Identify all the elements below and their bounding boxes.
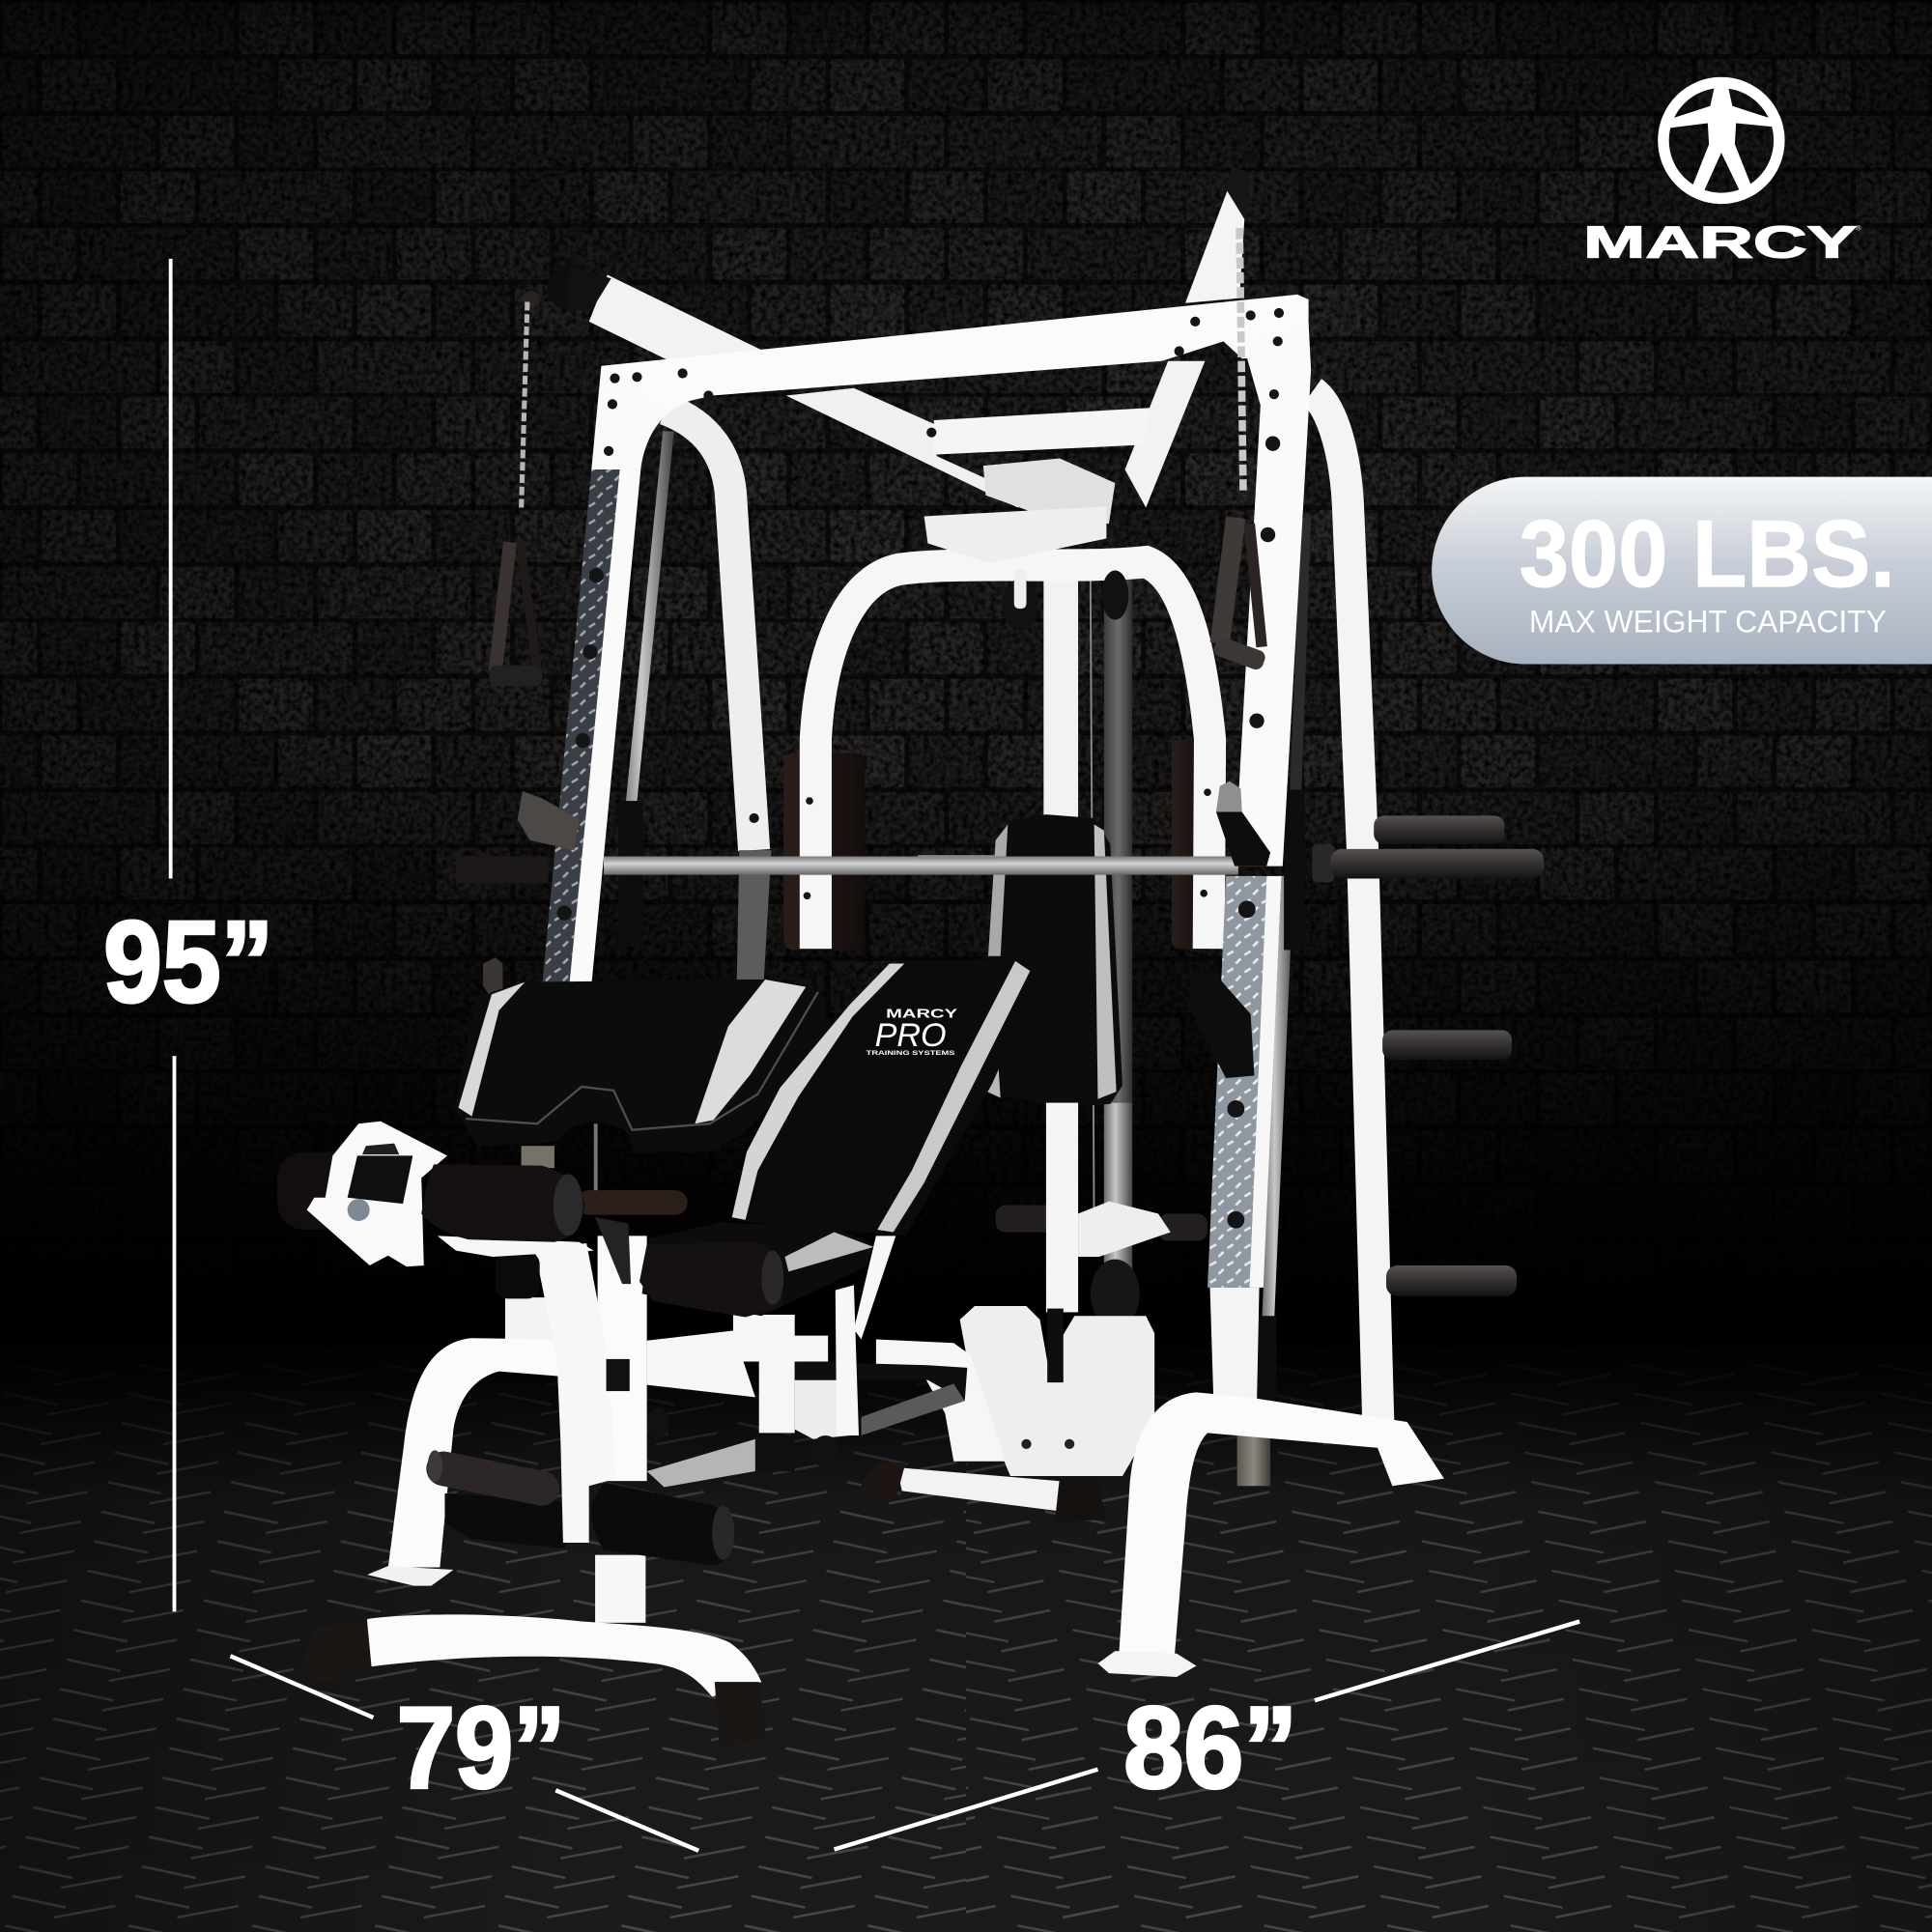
weight stack pulley <box>1091 1260 1140 1328</box>
rear pulley arm lower span <box>786 388 1023 508</box>
far leg roller <box>277 1152 363 1230</box>
callout: max weight capacity <box>1432 477 1932 665</box>
lower bar catch <box>1190 972 1254 1078</box>
dimension: height <box>103 259 273 1611</box>
depth line left <box>231 1656 373 1718</box>
barbell <box>604 855 1238 875</box>
backrest logo: PRO <box>875 1017 947 1054</box>
leg adjuster peg <box>589 1193 675 1212</box>
pec pad left <box>783 753 865 950</box>
rail knobs <box>647 1407 840 1467</box>
back pad <box>984 814 1122 1108</box>
cross bar <box>934 408 1150 455</box>
weight pegs <box>996 815 1517 1296</box>
right handle <box>1211 518 1267 671</box>
logo: Marcy <box>1583 82 1861 268</box>
left guide rod collar <box>618 801 643 947</box>
rear under-seat roller <box>496 1252 540 1298</box>
center bracket <box>924 506 1106 563</box>
center cable column upper <box>1104 579 1132 1103</box>
backrest logo: TRAINING SYSTEMS <box>867 1050 955 1057</box>
right front leg arch <box>1119 1392 1444 1660</box>
left barbell stop <box>456 791 579 884</box>
rear foot <box>856 1463 1106 1523</box>
left handle <box>489 540 542 686</box>
right front foot <box>1097 1651 1197 1677</box>
bench struts <box>836 1236 895 1435</box>
pulley bracket <box>1078 1202 1171 1257</box>
background: tread plate floor <box>0 1337 1932 1932</box>
foot plate <box>960 1306 1154 1476</box>
left base block <box>505 1297 559 1345</box>
thin rod and plate below scoop pad <box>522 1123 598 1193</box>
right barbell sleeve <box>1312 844 1544 882</box>
background: brick wall <box>0 0 1932 1355</box>
left chrome guide rod <box>620 431 674 863</box>
width value: 86” <box>1123 1684 1297 1813</box>
right chain <box>1239 228 1243 493</box>
upper center bracket <box>983 458 1115 524</box>
center cable column lower <box>1104 1103 1132 1288</box>
height line lower <box>173 1056 176 1611</box>
front top beam <box>601 295 1309 407</box>
backrest logo <box>867 1007 958 1057</box>
logo emblem circle <box>1663 82 1779 198</box>
cable <box>1091 579 1094 1233</box>
right chrome guide rod <box>1262 876 1293 1324</box>
center white post upper <box>1043 573 1078 838</box>
right barbell stop <box>1216 781 1270 867</box>
chrome rail <box>647 1439 755 1488</box>
pec pad right <box>1172 739 1207 949</box>
center pulleys <box>1002 569 1128 631</box>
logo wordmark: MARCY <box>1583 217 1857 268</box>
width line right <box>1315 1622 1579 1700</box>
rear left arch shadowed leg <box>737 850 771 980</box>
left base arch <box>388 1338 560 1567</box>
right post white strip <box>1249 876 1282 1288</box>
gym machine <box>277 166 1544 1746</box>
bolts on frame <box>557 308 1284 1229</box>
right chrome rod upper <box>1287 518 1311 876</box>
lower front roller <box>591 1482 734 1565</box>
front left post and arch <box>569 356 712 985</box>
logo registered mark: ® <box>1856 224 1861 233</box>
front foot <box>297 1614 766 1746</box>
near leg roller <box>421 1164 585 1242</box>
black block below peg <box>444 1493 565 1548</box>
depth line right <box>555 1790 698 1851</box>
right guide rod collar lower <box>1252 1316 1276 1403</box>
height line upper <box>169 259 173 878</box>
rear right arch <box>1312 392 1378 1441</box>
left chain <box>522 301 527 511</box>
callout pill <box>1432 477 1932 665</box>
rear pulley arm <box>589 274 764 372</box>
center arch <box>815 562 1210 949</box>
dimension: depth <box>231 1656 698 1851</box>
white gusset beside backrest <box>781 1029 853 1099</box>
seat pad <box>639 1222 873 1318</box>
center post lower <box>1046 1103 1078 1312</box>
lower peg <box>428 1450 542 1489</box>
dark rail <box>862 1383 965 1435</box>
rail end box <box>755 1435 795 1471</box>
right top pulley bracket <box>1222 166 1249 222</box>
scoop pad <box>455 980 828 1152</box>
depth value: 79” <box>397 1684 565 1813</box>
height value: 95” <box>103 897 273 1027</box>
dimension: width <box>835 1622 1579 1850</box>
right diagonal brace <box>1185 191 1244 303</box>
leg adjuster white plate <box>307 1122 447 1266</box>
left base foot <box>367 1566 453 1586</box>
centre grey cylinder <box>1237 1435 1270 1486</box>
diamond plate left <box>542 469 620 985</box>
backrest logo: MARCY <box>886 1007 958 1021</box>
logo emblem figure <box>1668 84 1775 191</box>
callout value: 300 LBS. <box>1520 500 1895 607</box>
black cross bar <box>795 1361 967 1401</box>
diamond plate right <box>1208 876 1266 1288</box>
left catch <box>483 957 502 1001</box>
front right post <box>1235 323 1311 867</box>
incline backrest <box>732 958 1035 1236</box>
rear left arch <box>666 409 754 850</box>
width line left <box>835 1770 1097 1850</box>
white band under roller <box>438 1236 594 1257</box>
callout caption: MAX WEIGHT CAPACITY <box>1529 604 1887 639</box>
bench column <box>535 1217 647 1623</box>
bench rail frame <box>647 1315 1006 1462</box>
right guide rod collar upper <box>1284 790 1305 950</box>
right post lower <box>1210 1288 1260 1405</box>
left pulley <box>523 264 611 310</box>
